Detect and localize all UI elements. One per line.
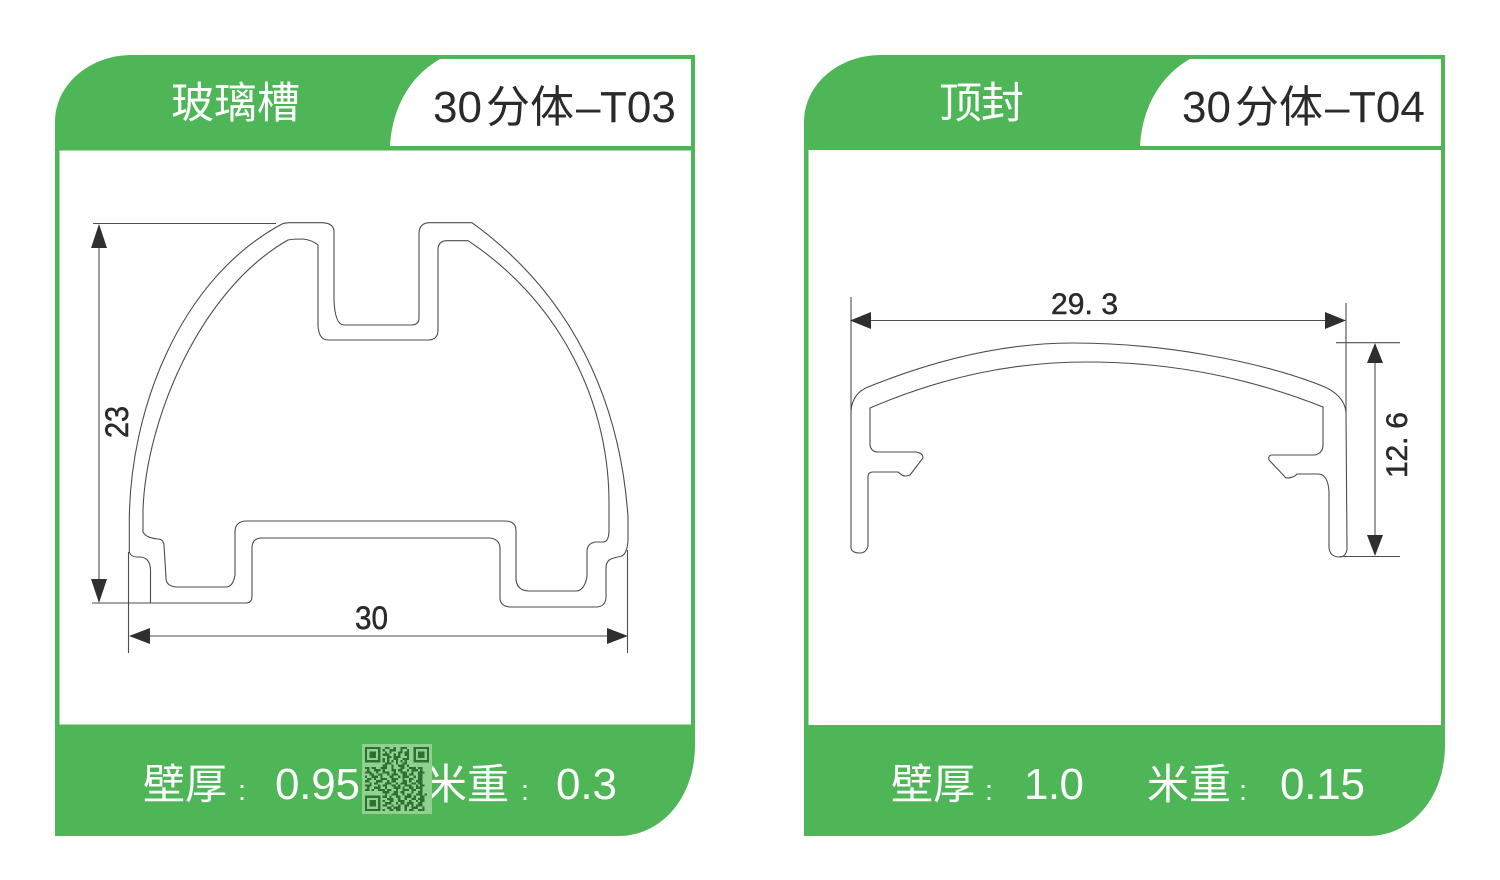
profile outline [92, 223, 628, 607]
profile outline [851, 343, 1347, 557]
heading: model: 分体 [1235, 83, 1323, 132]
panel frame [55, 55, 695, 836]
footer: metre weight: 0.3 [556, 760, 617, 809]
panel: top seal T04 [804, 55, 1445, 836]
footer: wall thickness: : [238, 775, 246, 807]
footer: wall thickness [891, 760, 1084, 809]
footer: metre weight: : [521, 775, 529, 807]
footer: wall thickness: 1.0 [1024, 760, 1084, 809]
footer: wall thickness [143, 760, 360, 809]
drawing area [808, 150, 1441, 725]
dimension: height 23 [91, 224, 276, 603]
heading: name: 顶封 [939, 80, 1024, 128]
drawing area [60, 150, 691, 724]
footer: metre weight [1147, 760, 1365, 809]
heading: model: – [1325, 83, 1350, 132]
dimension: height 12.6: 12. 6 [1381, 412, 1414, 478]
heading: model: T03 [600, 83, 676, 132]
footer: metre weight [425, 760, 617, 809]
heading: model: 30 [433, 83, 482, 132]
footer: wall thickness: 壁厚 [143, 761, 227, 808]
dimension: width 30: 30 [355, 600, 388, 636]
footer: metre weight: : [1239, 775, 1247, 807]
dimension: width 29.3 [850, 288, 1346, 412]
footer: metre weight: 0.15 [1280, 760, 1365, 809]
QR code [362, 744, 432, 814]
dimension: width 29.3: 29. 3 [1051, 288, 1118, 321]
footer: wall thickness: 壁厚 [891, 761, 975, 808]
footer: wall thickness: 0.95 [275, 760, 360, 809]
header tab [1140, 59, 1441, 146]
panel: glass channel T03 [55, 55, 695, 836]
panel frame [804, 55, 1445, 836]
dimension: height 12.6 [1336, 343, 1414, 556]
heading: model: T04 [1349, 83, 1425, 132]
heading: model: – [576, 83, 601, 132]
dimension: width 30 [128, 550, 628, 653]
heading: name: 玻璃槽 [171, 80, 300, 128]
footer: metre weight: 米重 [1147, 761, 1231, 808]
heading: model: 30 [1182, 83, 1231, 132]
heading: model: 分体 [486, 83, 574, 132]
footer: wall thickness: : [985, 775, 993, 807]
dimension: height 23: 23 [99, 406, 135, 438]
header tab [390, 59, 691, 146]
footer: metre weight: 米重 [425, 761, 509, 808]
